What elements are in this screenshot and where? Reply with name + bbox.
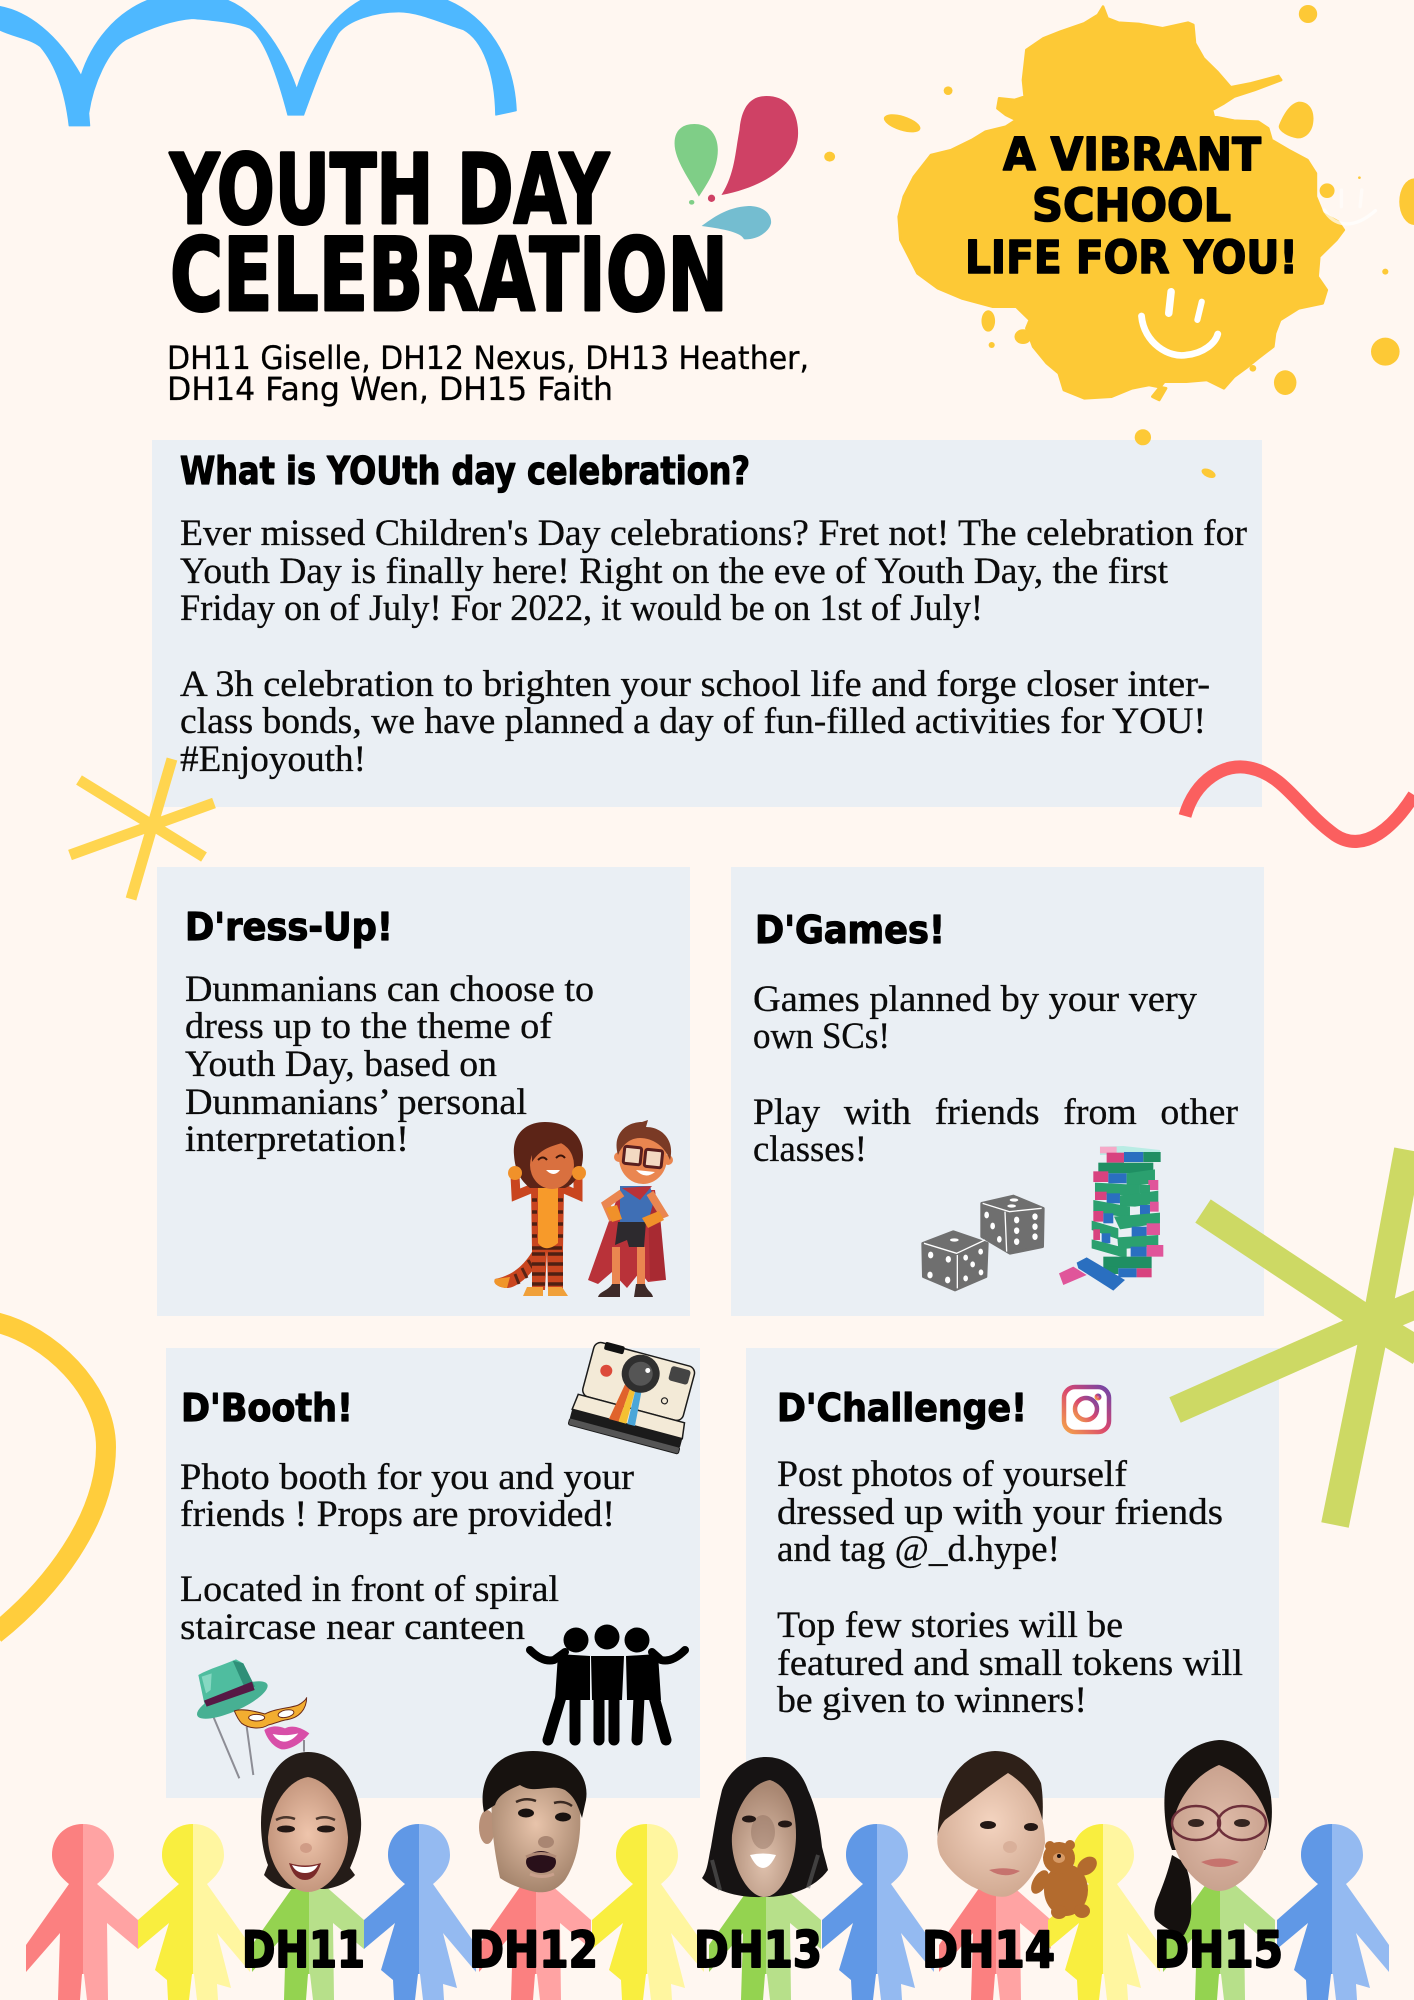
text block: booth: friends ! Props are provided! <box>180 1494 615 1535</box>
labels: house names: DH15 <box>1154 1921 1283 1979</box>
decoration: yellow arc <box>0 1322 106 1634</box>
portrait: DH13 <box>702 1757 828 1897</box>
text block: games: own SCs! <box>753 1016 890 1057</box>
title <box>169 134 728 334</box>
subtitle: names: DH14 Fang Wen, DH15 Faith <box>167 370 613 408</box>
title: CELEBRATION <box>170 216 728 334</box>
labels: house names: DH11 <box>242 1921 365 1979</box>
text block: dress up: Dunmanians’ personal <box>185 1082 527 1123</box>
heading: D'Challenge: D'Challenge! <box>777 1386 1027 1430</box>
text: a vibrant school life for you: SCHOOL <box>1032 179 1231 232</box>
panel: D'ress-Up <box>157 867 690 1316</box>
panel: what is YOUth day celebration <box>152 440 1262 807</box>
text block: challenge: and tag @_d.hype! <box>777 1529 1060 1570</box>
text block: dress up: dress up to the theme of <box>185 1006 553 1047</box>
text block: booth: Located in front of spiral <box>180 1569 559 1610</box>
labels: house names <box>242 1921 1283 1979</box>
text block: challenge: Top few stories will be <box>777 1605 1123 1646</box>
text: a vibrant school life for you <box>965 128 1298 284</box>
portrait: DH15 <box>1154 1740 1272 1935</box>
icon: colourful drops <box>675 96 835 239</box>
text block: intro: Ever missed Children's Day celebrations? Fret not! The celebration for <box>180 513 1247 554</box>
text block: intro <box>180 513 1247 780</box>
text block: intro: Friday on of July! For 2022, it would be on 1st of July! <box>180 588 983 629</box>
text block: challenge <box>777 1454 1243 1721</box>
icon: dice <box>923 1196 1043 1290</box>
text block: intro: Youth Day is finally here! Right on the eve of Youth Day, the first <box>180 551 1169 592</box>
panel: D'Challenge <box>746 1348 1279 1798</box>
decoration: red wave <box>1185 767 1414 841</box>
panel: D'Games <box>731 867 1264 1316</box>
text block: challenge: be given to winners! <box>777 1680 1087 1721</box>
labels: house names: DH13 <box>694 1921 822 1979</box>
icon: teddy bear <box>1027 1837 1101 1919</box>
text block: booth: Photo booth for you and your <box>180 1457 634 1498</box>
text block: games: Play with friends from other <box>753 1092 1238 1133</box>
text: a vibrant school life for you: LIFE FOR YOU! <box>965 231 1298 284</box>
text block: challenge: dressed up with your friends <box>777 1492 1223 1533</box>
callout: yellow splash <box>882 5 1414 480</box>
icon: party props <box>193 1659 309 1778</box>
subtitle: names: DH11 Giselle, DH12 Nexus, DH13 Heather, <box>167 339 809 377</box>
icon: white smile on splash <box>1142 190 1375 355</box>
icon: girl in tiger costume <box>494 1122 586 1296</box>
text block: dress up: Youth Day, based on <box>185 1044 497 1085</box>
labels: house names: DH12 <box>469 1921 598 1979</box>
icon: instant camera <box>568 1338 701 1454</box>
icon: three friends silhouette <box>530 1624 685 1740</box>
text block: booth <box>180 1457 634 1648</box>
heading: D'Booth: D'Booth! <box>181 1386 353 1430</box>
text block: dress up: Dunmanians can choose to <box>185 969 594 1010</box>
decoration: green asterisk <box>1175 1150 1414 1525</box>
portrait: DH14 <box>937 1751 1045 1897</box>
text block: challenge: Post photos of yourself <box>777 1454 1128 1495</box>
heading: D'ress-Up: D'ress-Up! <box>185 905 393 949</box>
text block: challenge: featured and small tokens will <box>777 1643 1243 1684</box>
portrait: DH12 <box>479 1751 587 1892</box>
text: a vibrant school life for you: A VIBRANT <box>1003 128 1261 181</box>
text block: intro: class bonds, we have planned a day of fun-filled activities for YOU! <box>180 701 1206 742</box>
paper people chain <box>26 1824 1389 2000</box>
text block: games: classes! <box>753 1129 867 1170</box>
decoration: yellow asterisk <box>70 759 214 899</box>
labels: house names: DH14 <box>922 1921 1055 1979</box>
text block: intro: A 3h celebration to brighten your school life and forge closer inter- <box>180 664 1210 705</box>
subtitle: names <box>167 339 809 408</box>
icon: boy in superhero cape <box>588 1120 673 1297</box>
icon: instagram logo <box>1064 1387 1109 1432</box>
text block: games: Games planned by your very <box>753 979 1198 1020</box>
text block: dress up <box>185 969 594 1160</box>
text block: dress up: interpretation! <box>185 1119 409 1160</box>
title: YOUTH DAY <box>169 134 610 246</box>
heading: what is youth day: What is YOUth day celebration? <box>180 449 750 493</box>
portrait: DH11 <box>261 1752 361 1892</box>
text block: intro: #Enjoyouth! <box>180 739 366 780</box>
icon: jenga tower <box>1059 1146 1163 1291</box>
text block: booth: staircase near canteen <box>180 1607 525 1648</box>
heading: D'Games: D'Games! <box>755 908 945 952</box>
text block: games <box>753 979 1238 1170</box>
panel: D'Booth <box>166 1338 701 1798</box>
decoration: blue arcs <box>0 0 516 126</box>
